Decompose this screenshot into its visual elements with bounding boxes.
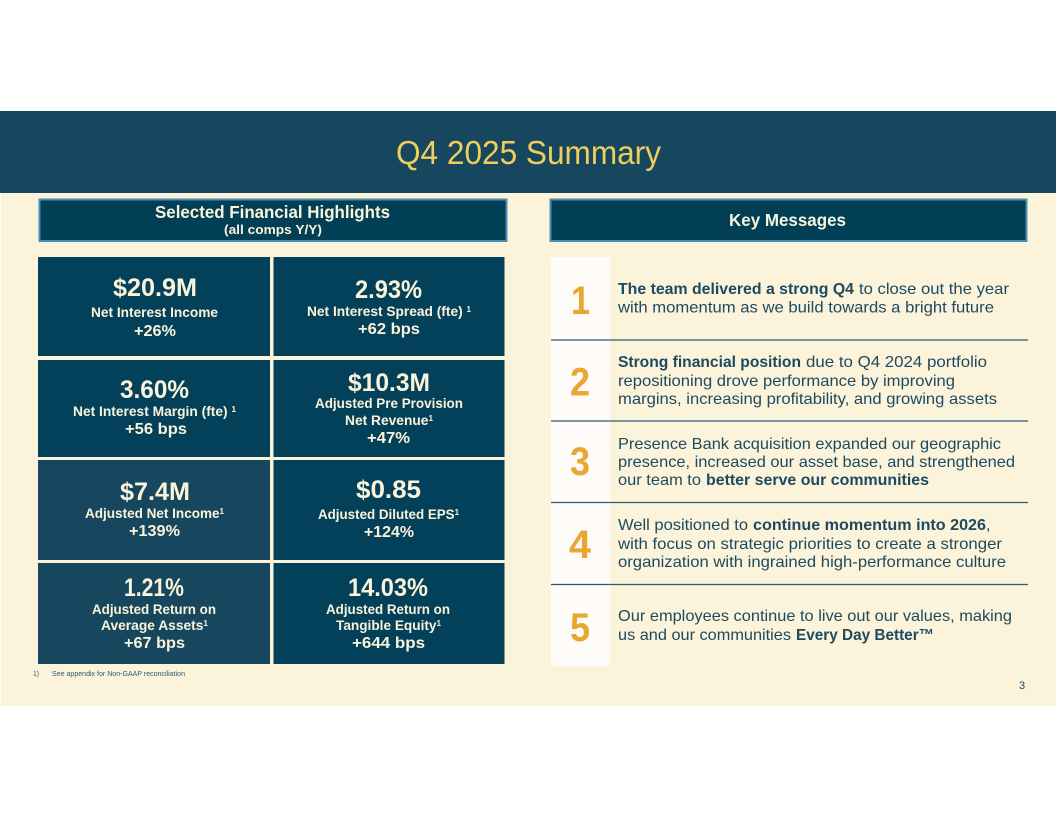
cream slide background	[1, 193, 1056, 706]
message 2: 2	[570, 360, 590, 404]
panel: financial highlights grid	[38, 257, 504, 664]
tile: net interest income	[38, 257, 270, 356]
message 3: better serve our communities	[706, 472, 929, 489]
tile: adjusted return on tangible equity: 1	[437, 619, 442, 628]
tile: adjusted diluted eps: +124%	[364, 524, 414, 541]
tile: adjusted diluted eps	[274, 460, 504, 560]
tile: adjusted pre provision net revenue: 1	[428, 414, 434, 423]
page number: 3	[1019, 680, 1025, 692]
message 4: Well positioned to	[618, 517, 748, 534]
tile: net interest margin	[38, 360, 270, 457]
title banner	[0, 111, 1056, 193]
message 1: 1	[571, 279, 590, 323]
message 2: margins, increasing profitability, and growing assets	[618, 391, 997, 408]
footnote: See appendix for Non-GAAP reconciliation	[52, 669, 185, 678]
tile: adjusted return on average assets	[38, 563, 270, 664]
tile: adjusted net income: +139%	[129, 523, 180, 540]
tile: net interest spread	[274, 257, 504, 356]
tile: adjusted return on average assets: +67 bps	[124, 635, 185, 652]
tile: adjusted return on tangible equity: Adjusted Return on	[326, 602, 450, 617]
tile: net interest income: Net Interest Income	[91, 305, 218, 320]
tile: adjusted pre provision net revenue	[274, 360, 504, 457]
tile: adjusted return on tangible equity	[274, 563, 504, 664]
message 4: with focus on strategic priorities to create a stronger	[617, 536, 1003, 553]
tile: adjusted pre provision net revenue: Net Revenue	[345, 413, 427, 428]
tile: net interest spread: 2.93%	[355, 276, 422, 304]
tile: adjusted return on average assets: 1	[203, 619, 209, 628]
tile: adjusted return on average assets: Average Assets	[101, 618, 201, 633]
message 2: repositioning drove performance by improving	[618, 373, 955, 390]
heading: selected financial highlights: Selected Financial Highlights	[155, 202, 390, 222]
tile: net interest margin: 1	[231, 405, 237, 414]
tile: net interest spread: +62 bps	[358, 321, 420, 338]
tile: adjusted net income	[38, 460, 270, 560]
tile: net interest spread: Net Interest Spread (fte)	[307, 304, 460, 319]
tile: adjusted pre provision net revenue: Adjusted Pre Provision	[315, 396, 463, 411]
tile: adjusted pre provision net revenue: $10.3M	[348, 369, 430, 397]
message 4: ,	[986, 517, 990, 534]
message 1	[571, 279, 1010, 323]
message 3	[570, 436, 1015, 489]
tile: adjusted diluted eps: 1	[455, 508, 460, 517]
message 5: 5	[570, 606, 590, 650]
message 5	[570, 606, 1012, 650]
tile: adjusted pre provision net revenue: +47%	[367, 430, 410, 447]
tile: net interest margin: Net Interest Margin (fte)	[73, 404, 225, 419]
number column	[551, 257, 610, 666]
tile: adjusted diluted eps: $0.85	[356, 476, 421, 504]
message 4: organization with ingrained high-performance culture	[618, 554, 1006, 571]
tile: net interest spread: 1	[466, 305, 472, 314]
message 5: us and our communities	[618, 627, 791, 644]
tile: adjusted return on average assets: Adjusted Return on	[92, 602, 216, 617]
tile: adjusted net income: 1	[220, 507, 225, 516]
message 3: Presence Bank acquisition expanded our geographic	[618, 436, 1001, 453]
message 4	[569, 517, 1006, 571]
tile: adjusted net income: $7.4M	[120, 478, 190, 506]
message 5: Our employees continue to live out our values, making	[618, 608, 1012, 625]
footnote: 1)	[33, 669, 39, 678]
tile: net interest income: $20.9M	[113, 274, 197, 302]
message 4: continue momentum into 2026	[753, 517, 986, 534]
message 1: to close out the year	[859, 281, 1010, 298]
panel: key messages list	[551, 257, 1028, 666]
tile: adjusted net income: Adjusted Net Income	[85, 506, 219, 521]
heading: key messages	[550, 200, 1026, 241]
tile: adjusted return on tangible equity: 14.03%	[348, 574, 428, 602]
message 3: presence, increased our asset base, and strengthened	[618, 454, 1015, 471]
heading: key messages: Key Messages	[729, 210, 846, 230]
tile: adjusted return on average assets: 1.21%	[124, 574, 184, 602]
tile: adjusted return on tangible equity: +644 bps	[352, 635, 425, 652]
message 3: our team to	[618, 472, 701, 489]
message 3: 3	[570, 440, 590, 484]
heading: selected financial highlights: (all comps Y/Y)	[224, 222, 322, 237]
message 1: The team delivered a strong Q4	[618, 281, 854, 298]
message 5: Every Day Better™	[796, 627, 934, 644]
message 4: 4	[569, 523, 592, 567]
tile: adjusted diluted eps: Adjusted Diluted EPS	[318, 507, 456, 522]
title: Q4 2025 Summary	[396, 134, 661, 171]
message 2: due to Q4 2024 portfolio	[806, 354, 987, 371]
tile: adjusted return on tangible equity: Tangible Equity	[336, 618, 436, 633]
tile: net interest margin: 3.60%	[120, 376, 189, 404]
tile: net interest margin: +56 bps	[125, 421, 187, 438]
message 1: with momentum as we build towards a bright future	[617, 300, 994, 316]
message 2	[570, 354, 997, 408]
message 2: Strong financial position	[618, 354, 801, 371]
heading: selected financial highlights	[40, 200, 506, 241]
tile: net interest income: +26%	[134, 323, 176, 340]
